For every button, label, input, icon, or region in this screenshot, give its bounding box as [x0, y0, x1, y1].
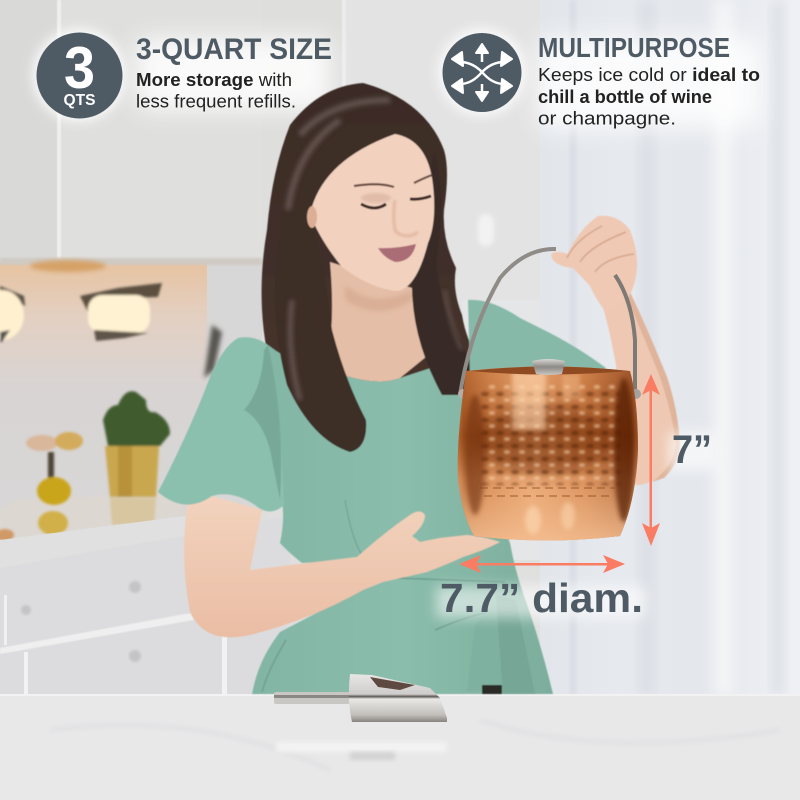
- text: multipurpose description: or champagne.: [538, 108, 676, 128]
- arrow: diameter: [459, 555, 625, 573]
- hair front locks: [275, 134, 395, 452]
- dress right sleeve: [468, 300, 606, 378]
- copper ice bucket: [450, 249, 645, 550]
- heading: 3-quart size: 3-QUART SIZE: [136, 33, 332, 66]
- ice scoop on counter: [274, 674, 447, 722]
- text: storage description: [136, 70, 296, 112]
- icon: 3 QTS badge: 3: [64, 35, 95, 101]
- background dark object: [204, 325, 222, 378]
- wall lamp left: [0, 286, 25, 342]
- dress body: [252, 345, 553, 694]
- raised forearm and hand on the handle: [551, 216, 680, 485]
- callout: 3-quart size: [36, 32, 332, 118]
- lid rim: [470, 366, 628, 374]
- glow behind dimension labels: [436, 432, 716, 618]
- icon: 3 QTS badge: QTS: [64, 92, 96, 109]
- hair back: [262, 83, 480, 453]
- face: [310, 134, 434, 291]
- right curtain: [540, 0, 800, 695]
- woman holding the ice bucket: [158, 83, 680, 694]
- text: multipurpose description: chill a bottle of wine: [538, 87, 712, 107]
- neck and chest: [328, 262, 432, 382]
- arm and hand under the bucket: [184, 490, 500, 637]
- eyebrows and eyes: [354, 175, 432, 187]
- backsplash with warm under-cabinet light: [0, 262, 207, 517]
- waist seam and sash: [262, 500, 535, 694]
- nose shading: [394, 200, 418, 236]
- soft white glow behind callouts: [33, 29, 760, 128]
- icon: 3 QTS badge: [36, 32, 122, 118]
- wall lamp centre: [80, 283, 162, 341]
- lower drawers: [0, 515, 290, 695]
- left puff sleeve: [158, 337, 284, 512]
- text: multipurpose description: Keeps ice cold or ideal to: [538, 65, 760, 85]
- ear: [307, 206, 317, 228]
- icon: multi-direction arrows: [442, 33, 522, 112]
- heading: multipurpose: MULTIPURPOSE: [538, 32, 730, 63]
- lid knob: [532, 359, 565, 375]
- callout: multipurpose: [442, 32, 760, 128]
- dresser top surface: [0, 492, 185, 540]
- wall cabinets: [0, 0, 540, 560]
- white marble counter: [0, 694, 800, 800]
- gold ornaments: [0, 432, 83, 541]
- handle: [460, 249, 556, 395]
- potted plant: [103, 391, 170, 525]
- hair highlights: [288, 100, 462, 400]
- text: storage description: More storage with: [136, 70, 292, 90]
- arrow: height: [642, 374, 660, 546]
- under-cabinet lamp: [30, 260, 106, 272]
- label: height 7 inches: 7”: [672, 428, 712, 472]
- lips: [378, 244, 416, 262]
- text: multipurpose description: [538, 65, 760, 128]
- label: diameter 7.7 inches: 7.7” diam.: [440, 575, 643, 621]
- body: [458, 366, 638, 540]
- text: storage description: less frequent refills.: [136, 92, 296, 112]
